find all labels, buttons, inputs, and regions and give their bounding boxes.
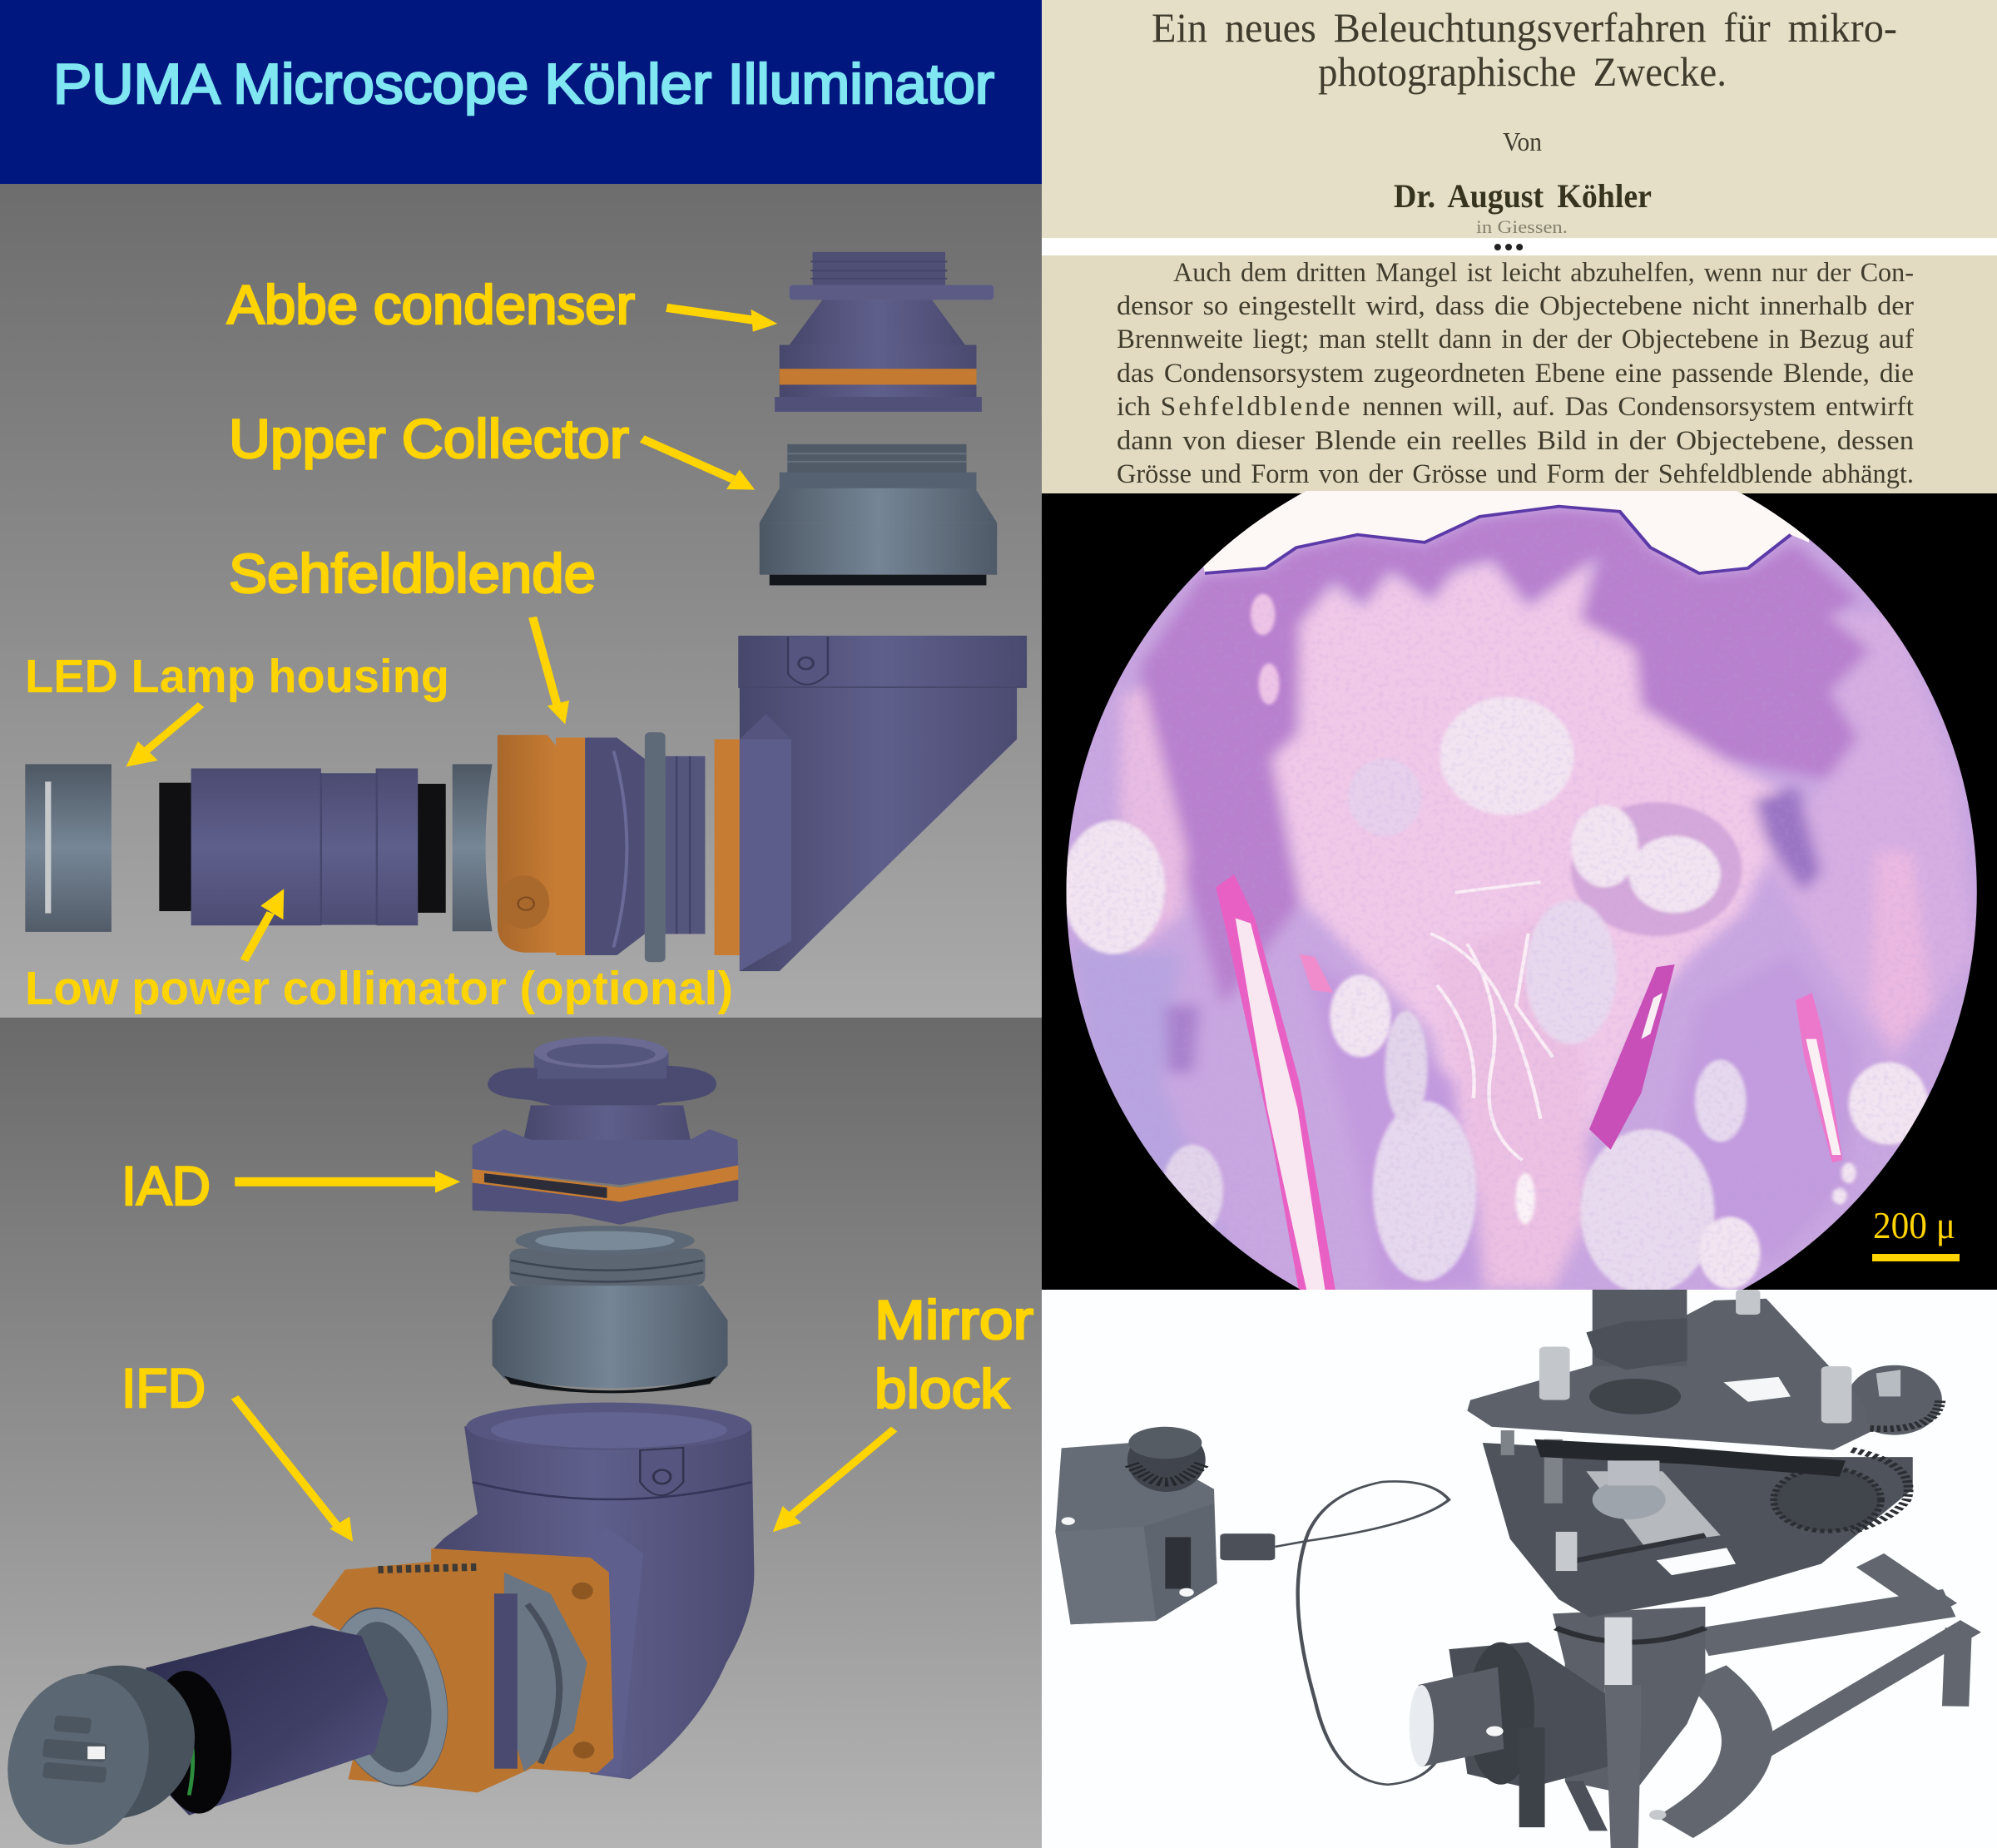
tissue: left lower band <box>1071 944 1296 1315</box>
title banner <box>0 0 1042 184</box>
part: mirror block <box>431 1403 754 1779</box>
paper byline: Von <box>1503 126 1542 156</box>
part: collector <box>493 1226 728 1393</box>
paper byline: in Giessen. <box>1476 216 1568 237</box>
texture <box>1067 590 1924 1290</box>
paper title: photographische Zwecke. <box>1318 48 1727 95</box>
panel: Köhler paper excerpt <box>1042 0 1997 493</box>
paper paragraph <box>1117 258 1914 489</box>
arrow: collimator <box>244 889 284 960</box>
part: grey ring <box>315 1601 462 1793</box>
part: Abbe condenser <box>775 252 994 412</box>
part: low power collimator <box>159 768 446 925</box>
collector lamp <box>1410 1642 1608 1827</box>
arrow: Sehfeldblende <box>533 617 569 725</box>
paper paragraph: Grösse und Form von der Grösse und Form der Sehfeldblende abhängt. <box>1117 459 1914 489</box>
skin surface <box>1187 491 1809 573</box>
label: Abbe condenser: Abbe condenser <box>227 274 635 335</box>
part: small ring <box>453 764 493 931</box>
part: upper collector <box>760 444 997 585</box>
arrow: upper collector <box>642 438 755 490</box>
stain line at surface <box>1205 507 1791 573</box>
paper title: Ein neues Beleuchtungsverfahren für mikro- <box>1152 4 1897 51</box>
tissue: right mottled band <box>1767 614 1974 1068</box>
paper paragraph: Brennweite liegt; man stellt dann in der der Objectebene in Bezug auf <box>1117 325 1914 354</box>
gear <box>1774 1365 1942 1532</box>
belt <box>1534 1439 1846 1477</box>
paper paragraph: ich Sehfeldblende nennen will, auf. Das Condensorsystem entwirft <box>1117 392 1914 422</box>
condenser body <box>1553 1607 1705 1796</box>
part: orange mount <box>312 1548 613 1792</box>
label: Sehfeldblende: Sehfeldblende <box>229 543 596 604</box>
tissue: epidermis <box>1141 509 1870 1006</box>
objective and slide <box>1556 1460 1736 1575</box>
title: PUMA Microscope Köhler Illuminator <box>53 52 994 116</box>
column <box>1586 1290 1687 1414</box>
paper title <box>1152 4 1897 95</box>
label: Mirror block: Mirror <box>875 1289 1033 1350</box>
arrow: LED lamp housing <box>126 705 201 767</box>
upper stage plate <box>1467 1299 1870 1450</box>
springs <box>1539 1290 1851 1423</box>
hair shafts <box>1216 874 1842 1294</box>
stage rods <box>1501 1430 1563 1504</box>
frame arm and base <box>1675 1560 1970 1827</box>
paper paragraph: densor so eingestellt wird, dass die Objectebene nicht innerhalb der <box>1117 291 1914 321</box>
label: Mirror block: block <box>875 1358 1010 1419</box>
part: IAD assembly <box>473 1037 738 1225</box>
panel: assembled perspective view <box>0 1018 1042 1848</box>
label: Low power collimator: Low power collimator (optional) <box>25 962 733 1015</box>
part: Sehfeldblende (orange) <box>498 735 585 955</box>
scale bar: 200 μ <box>1873 1204 1955 1246</box>
sebaceous lobes <box>1062 594 1928 1294</box>
control box <box>1055 1427 1217 1624</box>
paper paragraph: dann von dieser Blende ein reelles Bild in der Objectebene, dessen <box>1117 426 1914 456</box>
panel: exploded side view <box>0 184 1042 1018</box>
paper byline <box>1394 126 1652 237</box>
slot <box>1723 1377 1791 1402</box>
paper paragraph: das Condensorsystem zugeordneten Ebene eine passende Blende, die <box>1117 359 1914 389</box>
part: LED lamp housing ring <box>25 764 111 932</box>
arrow: mirror block <box>773 1429 894 1532</box>
label: LED Lamp housing: LED Lamp housing <box>25 650 449 703</box>
collagen network <box>1430 882 1553 1160</box>
arrow: Abbe condenser <box>666 308 777 332</box>
label: Upper Collector: Upper Collector <box>229 408 629 469</box>
tissue: pale dermis <box>1272 561 1796 1211</box>
label: Mirror block <box>875 1289 1033 1419</box>
part: LED lamp housing <box>0 1657 239 1848</box>
panel: photo of microscope with illuminator <box>1042 1290 1997 1848</box>
support rods <box>1565 1618 1666 1848</box>
power cable <box>1220 1481 1449 1785</box>
panel: histology micrograph <box>1040 491 1997 1315</box>
part: collimator body <box>146 1625 388 1816</box>
ellipsis: ••• <box>1494 234 1524 260</box>
label: IAD: IAD <box>121 1155 211 1216</box>
part: lens and nut <box>585 732 740 962</box>
arrow: IAD <box>235 1171 460 1193</box>
lower stage plate <box>1483 1443 1913 1618</box>
paper paragraph: Auch dem dritten Mangel ist leicht abzuhelfen, wenn nur der Con- <box>1173 258 1914 288</box>
paper byline: Dr. August Köhler <box>1394 177 1652 215</box>
part: mirror block <box>738 636 1027 971</box>
label: IFD: IFD <box>121 1357 206 1419</box>
arrow: IFD <box>235 1397 353 1542</box>
